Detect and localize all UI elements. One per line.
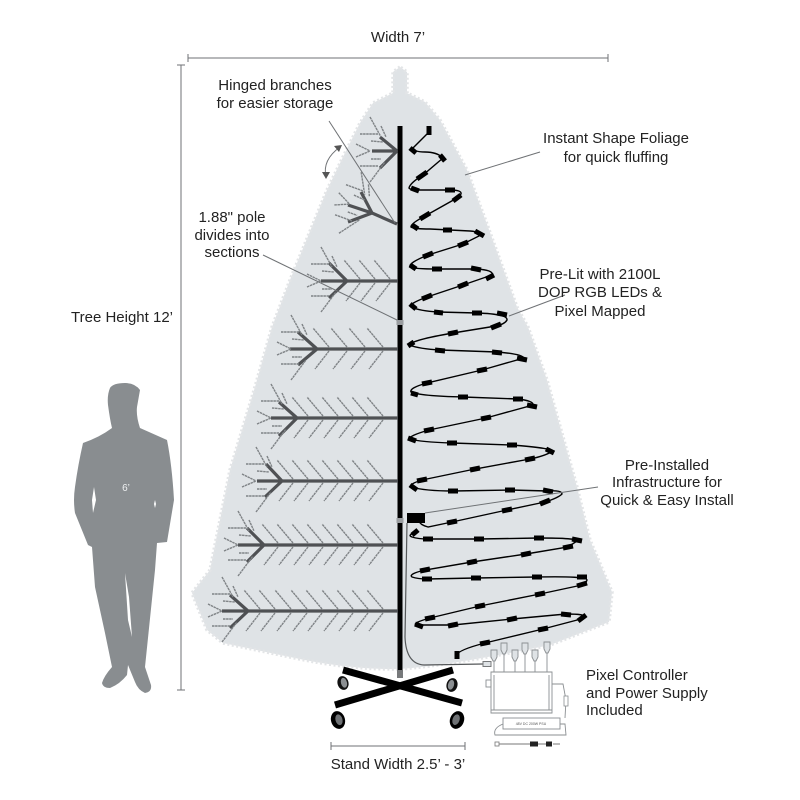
stand width label: Stand Width 2.5’ - 3’ (331, 756, 465, 773)
leader line: foliage (465, 152, 540, 175)
pre-installed control box (407, 513, 425, 523)
label: foliage: for quick fluffing (564, 149, 668, 166)
label: controller: Pixel Controller (586, 667, 688, 684)
label: infrastructure: Infrastructure for (612, 474, 722, 491)
leader line: hinged branches (329, 121, 395, 223)
label: pole: sections (204, 244, 260, 261)
label: hinged branches: for easier storage (217, 95, 333, 112)
label: foliage: Instant Shape Foliage (543, 130, 689, 147)
hinge motion arrow (322, 145, 342, 179)
caster front right (447, 709, 467, 731)
branch 5 (257, 384, 398, 449)
data cable to controller (405, 523, 491, 666)
branch 1: hinged, raised (356, 117, 397, 182)
pixel controller and power supply (486, 642, 568, 746)
caster rear right (445, 677, 459, 693)
label: LEDs: DOP RGB LEDs & (538, 284, 662, 301)
caster front left (329, 709, 347, 731)
label: LEDs: Pixel Mapped (555, 303, 645, 320)
branch 2: hinged, angled (326, 167, 397, 239)
leader line: pole (263, 255, 397, 320)
width dimension line (188, 54, 608, 62)
caster rear left (336, 675, 350, 691)
label: pole: 1.88" pole (198, 209, 266, 226)
stand width dimension line (331, 742, 465, 750)
person silhouette for scale (74, 383, 174, 693)
label: controller: and Power Supply (586, 685, 708, 702)
label: LEDs: Pre-Lit with 2100L (540, 266, 660, 283)
stand with casters (329, 670, 467, 731)
label: infrastructure: Quick & Easy Install (600, 492, 734, 509)
leader line: infrastructure (425, 487, 598, 513)
pole (396, 126, 404, 678)
power supply tiny label: 48V DC 200W PSU (516, 722, 547, 726)
branch 3 (307, 247, 398, 312)
leader line: LEDs (509, 295, 565, 316)
branch 4 (277, 315, 398, 380)
label: infrastructure: Pre-Installed (625, 457, 709, 474)
LED light string upper spiral (408, 126, 587, 659)
label: pole: divides into (194, 227, 270, 244)
LED pixel modules (408, 126, 587, 659)
label: controller: Included (586, 702, 643, 719)
person height label: 6’ (122, 483, 130, 494)
label: hinged branches: Hinged branches (218, 77, 332, 94)
height dimension line (177, 65, 185, 690)
width label: Width 7’ (371, 29, 425, 46)
tree height label: Tree Height 12’ (71, 309, 173, 326)
branch 6 (242, 447, 398, 512)
tree foliage silhouette (192, 67, 612, 669)
branch 7 (224, 511, 398, 576)
branch 8 (208, 577, 398, 642)
